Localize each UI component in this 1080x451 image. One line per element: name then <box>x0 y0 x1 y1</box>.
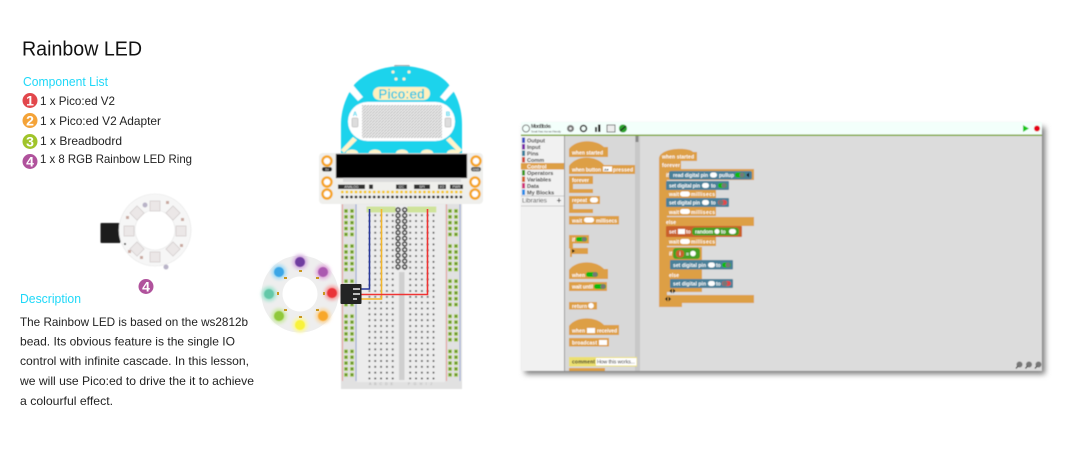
column labels: A B C D E <box>369 382 394 386</box>
comment <box>569 357 637 366</box>
if: if <box>572 238 575 244</box>
if i equals: i <box>679 252 681 258</box>
category sidebar: Libraries <box>522 198 548 204</box>
set i random: to <box>721 230 726 236</box>
when button: A▾ <box>604 167 609 172</box>
logo <box>522 124 562 134</box>
description text: control with infinite cascade. In this lesson, <box>20 354 249 368</box>
Pico:ed V2 adapter: 3V <box>325 168 329 172</box>
Pico:ed V2 adapter: PWR <box>453 185 461 189</box>
tie point holes <box>366 206 396 382</box>
pin labels <box>338 184 463 189</box>
description text <box>19 315 254 408</box>
item 2: Pico:ed V2 Adapter: 2 <box>26 112 34 128</box>
wait until <box>569 282 607 291</box>
category sidebar: Comm <box>527 158 544 164</box>
nested set pin on: to <box>716 263 721 269</box>
Pico:ed V2 adapter: ANALOG <box>344 185 359 189</box>
if read digital pin: pullup <box>719 173 734 179</box>
if <box>569 235 589 248</box>
description text: bead. Its obvious feature is the single IO <box>20 334 235 348</box>
if i equals: if <box>669 252 672 258</box>
set i random: random <box>695 230 714 236</box>
LED ring connector <box>340 284 362 304</box>
breadboard: F G H I J <box>408 382 432 386</box>
badge 4 below ring <box>138 278 154 294</box>
description text: The Rainbow LED is based on the ws2812b <box>20 315 248 329</box>
board stripes <box>341 70 462 156</box>
when received: when <box>571 328 585 334</box>
item 4: LED ring: 4 <box>26 154 34 170</box>
category sidebar: Pins <box>527 151 539 157</box>
description text: we will use Pico:ed to drive the it to achieve <box>19 374 254 388</box>
when started: when started <box>571 150 603 156</box>
when received: received <box>597 328 617 334</box>
when button: when button <box>571 168 601 174</box>
if read digital pin: read digital pin <box>673 173 708 179</box>
wait until: wait until <box>571 284 594 290</box>
category sidebar: Output <box>527 138 545 144</box>
set pin on: set digital pin <box>669 184 700 190</box>
hat and forever labels <box>661 154 694 169</box>
when: when <box>571 273 585 279</box>
wait 2: millisecs <box>691 210 715 216</box>
category sidebar: My Blocks <box>527 190 554 196</box>
else: else <box>666 220 676 226</box>
toolbar icons <box>567 124 627 132</box>
item 3: Breadboard: 1 x Breadbodrd <box>40 134 122 148</box>
comment: comment <box>572 360 595 366</box>
category sidebar: Variables <box>527 177 551 183</box>
nested set pin off <box>670 279 733 288</box>
category sidebar: Input <box>527 145 541 151</box>
logo: MicroBlocks <box>531 124 551 130</box>
else arm <box>570 248 588 257</box>
category sidebar: Data <box>527 184 540 190</box>
block palette <box>569 141 637 371</box>
run and stop <box>1023 125 1040 132</box>
LED matrix panel: A <box>353 112 358 118</box>
item 1: Pico:ed V2: 1 <box>26 92 34 108</box>
heading: component list: Component List <box>23 75 108 89</box>
repeat <box>569 196 600 213</box>
wait 3: millisecs <box>691 240 715 246</box>
category sidebar: + <box>557 196 562 205</box>
badge 4 below ring: 4 <box>142 278 150 294</box>
heading: description: Description <box>20 292 81 306</box>
set i random <box>666 226 742 237</box>
set i random: set <box>669 230 677 236</box>
wait: wait <box>571 218 582 224</box>
script body <box>659 149 754 307</box>
LED matrix panel: B <box>446 112 451 118</box>
category sidebar: Operators <box>527 171 553 177</box>
nested set pin off: set digital pin <box>673 282 706 288</box>
Pico:ed V2 board <box>341 65 462 156</box>
set pin off: set digital pin <box>669 200 700 206</box>
category sidebar <box>521 136 640 371</box>
Pico:ed V2 adapter: I/O <box>440 185 445 189</box>
next block <box>569 368 605 371</box>
item 3: Breadboard: 3 <box>26 134 34 150</box>
wait 2 <box>668 209 715 216</box>
item 1: Pico:ed V2 <box>22 92 115 108</box>
nested set pin on: set digital pin <box>673 263 706 269</box>
hat and forever labels: when started <box>661 154 694 160</box>
MicroBlocks window <box>521 122 1042 371</box>
breadboard <box>341 200 462 389</box>
when received <box>569 318 619 335</box>
forever: forever <box>572 178 589 184</box>
repeat: repeat <box>572 198 587 204</box>
if i equals <box>669 248 700 259</box>
nested else: else <box>669 273 679 279</box>
wires <box>353 209 428 299</box>
return: return <box>572 304 587 310</box>
Pico:ed V2 adapter: I2C <box>399 185 405 189</box>
right power rail <box>447 208 459 377</box>
broadcast: broadcast <box>572 340 597 346</box>
set pin on: to <box>711 184 716 190</box>
forever <box>569 176 593 193</box>
component list <box>22 92 192 170</box>
wait 3: wait <box>668 240 679 246</box>
hat and forever labels: forever <box>662 163 680 169</box>
logo: Small. Fast. Human Friendly <box>531 130 562 134</box>
main script <box>659 149 754 307</box>
zoom controls <box>1016 362 1042 368</box>
set pin off: to <box>711 200 716 206</box>
if read digital pin: if <box>666 173 669 179</box>
when button <box>569 158 635 174</box>
title: Rainbow LED <box>22 38 142 60</box>
header pins <box>395 207 408 270</box>
if i equals: = <box>686 252 689 258</box>
expand arrows <box>665 288 676 302</box>
comment: How this works... <box>597 360 635 366</box>
wait 2: wait <box>668 210 679 216</box>
toolbar <box>521 122 1042 136</box>
item 2: Pico:ed V2 Adapter: 1 x Pico:ed V2 Adapter <box>40 114 161 128</box>
item 4: LED ring <box>22 152 192 170</box>
wait 1 <box>668 192 715 198</box>
description text: a colourful effect. <box>20 394 113 408</box>
Pico:ed V2 adapter: SPI <box>419 185 425 189</box>
left power rail <box>343 208 355 377</box>
rainbow LED ring <box>262 254 340 332</box>
when <box>569 262 608 279</box>
nested set pin off: to <box>716 282 721 288</box>
LEDs <box>262 254 340 332</box>
MicroBlocks window shadow <box>525 127 1045 374</box>
nested set pin on <box>670 260 733 270</box>
wait 1: millisecs <box>691 192 715 198</box>
item 4: LED ring: 1 x 8 RGB Rainbow LED Ring <box>40 152 192 166</box>
Pico:ed V2 adapter: GND <box>473 168 480 172</box>
board logo: Pico:ed <box>378 86 424 102</box>
Pico:ed V2 adapter <box>319 153 483 204</box>
set pin on <box>666 181 729 190</box>
wait: millisecs <box>596 218 617 224</box>
item 1: Pico:ed V2: 1 x Pico:ed V2 <box>40 94 115 108</box>
broadcast <box>569 338 609 346</box>
LED matrix panel <box>348 102 455 141</box>
if read digital pin <box>666 171 752 180</box>
set pin off <box>666 198 729 207</box>
wait 3 <box>668 239 715 246</box>
adapter pads <box>322 156 480 198</box>
pin headers <box>340 190 463 194</box>
when started <box>569 141 608 157</box>
photo: LED ring module <box>100 194 191 270</box>
when button: pressed <box>613 168 633 174</box>
return <box>569 302 597 310</box>
wait <box>569 216 619 224</box>
wait 1: wait <box>668 192 679 198</box>
category sidebar: Control <box>527 164 547 170</box>
set i random: to <box>686 230 691 236</box>
